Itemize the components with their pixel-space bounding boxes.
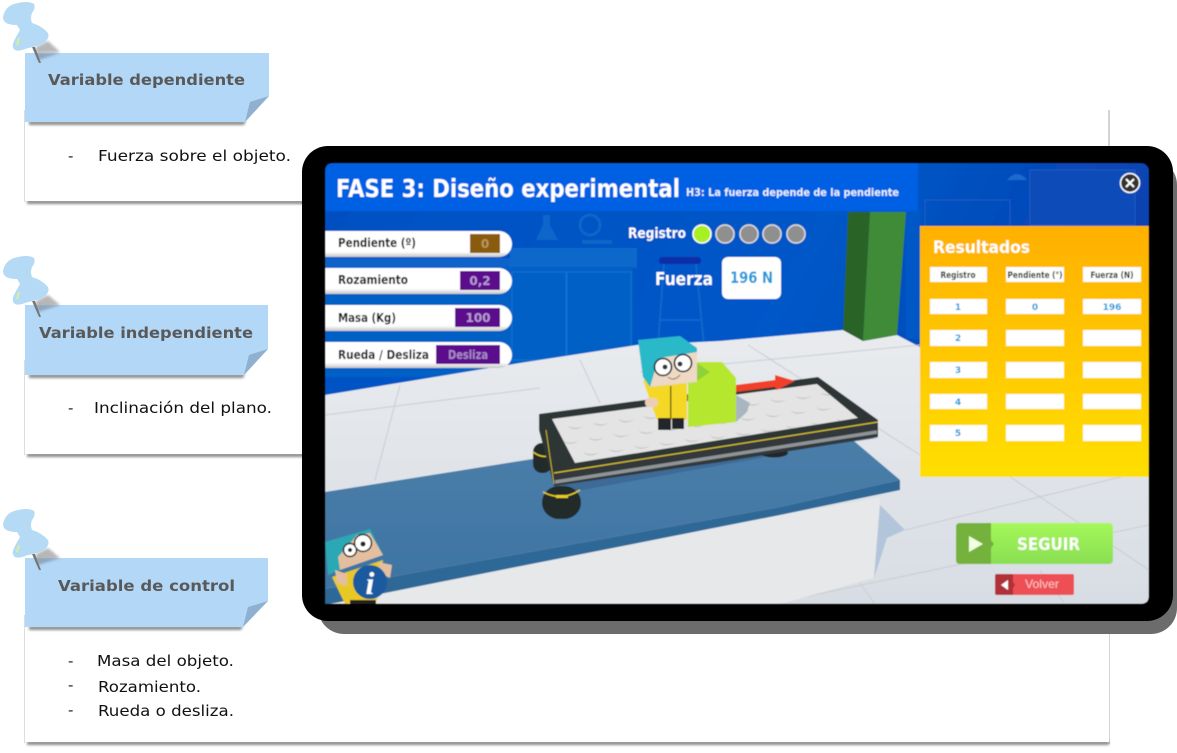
panel: variable independiente — [3, 256, 320, 457]
note: heading — [25, 558, 268, 630]
text: control list: Masa del objeto. — [97, 652, 234, 670]
background: lab wall — [325, 163, 1149, 604]
panel: resultados table: 2 — [955, 334, 961, 344]
arrow: force — [736, 375, 795, 392]
button: seguir: SEGUIR — [1017, 535, 1080, 555]
button: close — [1120, 174, 1140, 192]
control: pendiente: Pendiente (º) — [338, 235, 416, 250]
force readout: 196 N — [730, 268, 773, 287]
panel: resultados table: Resultados — [933, 238, 1030, 258]
info mascot — [325, 529, 392, 604]
panel: resultados table: 196 — [1103, 303, 1121, 313]
control: rueda o desliza — [325, 342, 512, 368]
panel: tablet frame — [302, 146, 1177, 634]
panel: resultados table: Pendiente (°) — [1008, 271, 1062, 281]
text: control list: Rueda o desliza. — [98, 702, 234, 720]
panel: resultados table: 4 — [955, 398, 961, 408]
lime cube — [688, 362, 736, 427]
text: inclinacion: Inclinación del plano. — [94, 399, 272, 417]
force readout: Fuerza — [655, 269, 713, 290]
button: seguir — [956, 523, 1113, 564]
panel: resultados table: Fuerza (N) — [1090, 271, 1134, 281]
character — [638, 336, 697, 430]
panel: variable dependiente — [3, 2, 320, 204]
panel: resultados table: 1 — [955, 303, 961, 313]
background: green pillar — [843, 212, 906, 341]
text: fuerza: - — [68, 147, 73, 165]
panel: resultados table: 3 — [955, 366, 961, 376]
note: heading: Variable de control — [58, 577, 235, 595]
title bar: H3: La fuerza depende de la pendiente — [686, 186, 899, 199]
text: control list: - — [68, 652, 73, 670]
icon: pushpin — [3, 509, 60, 570]
text: control list — [68, 652, 234, 720]
balance plate with feet — [533, 377, 878, 519]
note: heading — [25, 305, 268, 378]
panel: variable de control — [3, 509, 268, 743]
control: rozamiento — [325, 268, 512, 294]
control: pendiente — [325, 231, 512, 257]
control: rozamiento: Rozamiento — [338, 272, 408, 287]
icon: pushpin — [3, 256, 60, 317]
text: control list: - — [68, 676, 73, 694]
panel: game screen — [325, 163, 1149, 604]
control: rueda o desliza: Desliza — [448, 348, 488, 362]
text: fuerza: Fuerza sobre el objeto. — [98, 147, 291, 165]
text: control list: - — [68, 701, 73, 719]
note: heading — [25, 53, 269, 125]
info mascot: i — [366, 565, 375, 601]
control: masa: Masa (Kg) — [338, 310, 396, 325]
panel: outer frame — [25, 110, 1110, 745]
note: heading: Variable independiente — [39, 324, 253, 342]
text: inclinacion: - — [68, 399, 73, 417]
title bar — [325, 163, 918, 211]
control: rueda o desliza: Rueda / Desliza — [338, 347, 429, 362]
control: masa — [325, 305, 512, 331]
button: volver — [995, 574, 1074, 595]
panel: resultados table: 0 — [1032, 303, 1038, 313]
note: heading: Variable dependiente — [48, 71, 245, 89]
text: control list: Rozamiento. — [98, 678, 201, 696]
table — [325, 414, 905, 604]
title bar: FASE 3: Diseño experimental — [336, 174, 680, 203]
panel: resultados table: 5 — [955, 429, 961, 439]
panel: resultados table — [920, 226, 1149, 477]
force readout — [655, 257, 781, 299]
background: floor — [325, 330, 1149, 604]
panel: resultados table: Registro — [940, 271, 976, 281]
icon: pushpin — [3, 2, 60, 63]
registro indicator — [628, 225, 805, 243]
control: rozamiento: 0,2 — [469, 274, 491, 288]
button: volver: Volver — [1025, 577, 1059, 591]
control: masa: 100 — [465, 311, 491, 325]
control: pendiente: 0 — [481, 237, 489, 251]
registro indicator: Registro — [628, 226, 686, 242]
